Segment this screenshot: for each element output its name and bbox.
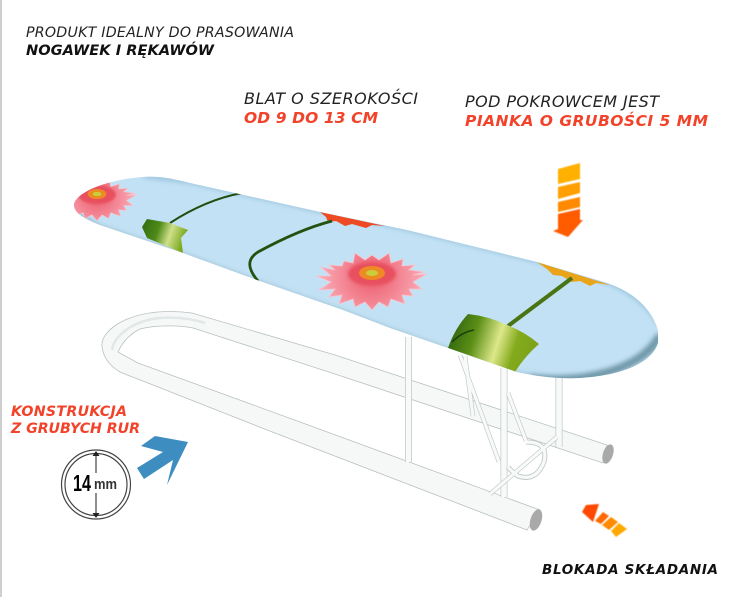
board: left leaf [142,219,188,253]
board: orange flower [537,262,610,286]
board: red flower [320,212,385,228]
label: thick tubes: KONSTRUKCJA [11,404,127,420]
label: board width: BLAT O SZEROKOŚCI [244,89,418,108]
heading: ideal product: NOGAWEK I RĘKAWÓW [26,41,215,59]
board: right stem [508,278,572,326]
icon: 14 mm tube diameter [62,450,130,519]
frame: tube shading [112,318,205,350]
board: left flower [74,182,137,221]
frame: rail end caps [527,443,616,532]
board: middle stem [250,221,332,281]
label: folding lock: BLOKADA SKŁADANIA [542,562,718,578]
frame: legs and latch [408,337,559,497]
label: board width: OD 9 DO 13 CM [244,109,379,127]
heading: ideal product: PRODUKT IDEALNY DO PRASOWANIA [26,25,294,41]
label: foam: PIANKA O GRUBOŚCI 5 MM [465,111,709,130]
ironing board [57,175,660,379]
icon: orange down arrow [553,163,583,237]
board: left stem [170,193,242,223]
label: board width [244,89,418,127]
board: cover [74,177,658,378]
label: thick tubes [10,404,140,437]
board: rim shading [74,175,660,379]
heading: ideal product [26,25,294,59]
icon: blue arrow [137,436,188,485]
icon: 14 mm tube diameter: 14 [73,470,91,496]
board: right leaf [448,314,539,372]
frame: tube [102,311,607,530]
tubular frame [102,311,616,532]
icon: small orange arrow [582,504,627,537]
label: foam [465,92,709,130]
label: thick tubes: Z GRUBYCH RUR [10,421,140,437]
label: foam: POD POKROWCEM JEST [465,92,660,111]
board: main flower [316,253,427,310]
icon: 14 mm tube diameter: mm [94,476,117,493]
page edge [0,0,2,597]
